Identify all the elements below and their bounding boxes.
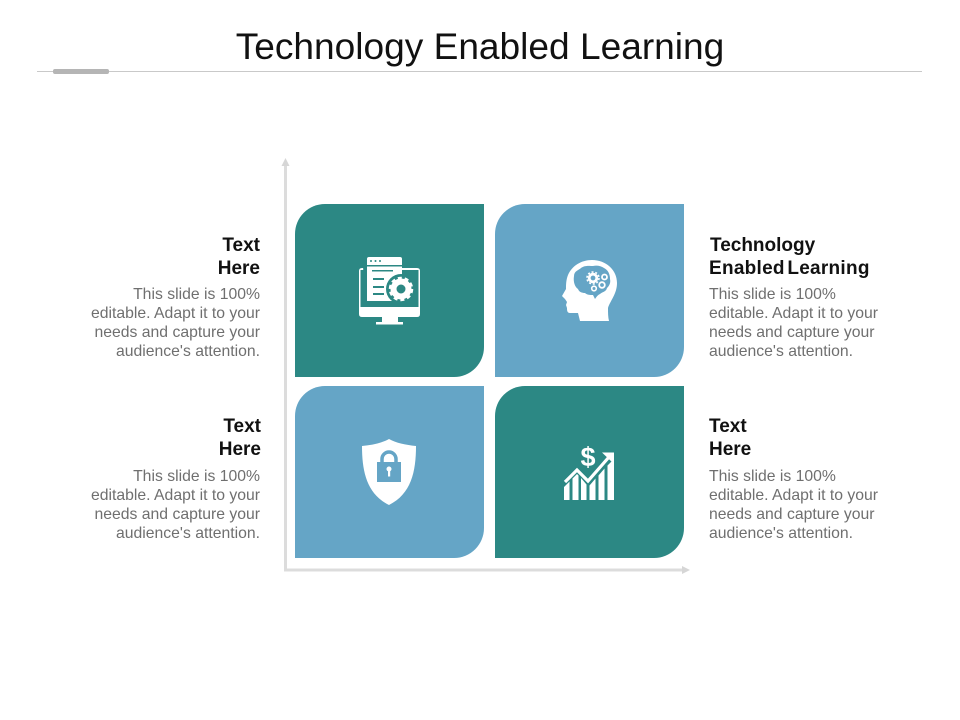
text block: top left: audience's attention.: [116, 343, 260, 360]
text block: bottom right: This slide is 100%: [709, 468, 836, 485]
text block: bottom right: editable. Adapt it to your: [709, 487, 878, 504]
text block: top right: [709, 235, 878, 360]
panel: top left tile: [295, 204, 484, 377]
text block: bottom right: Here: [709, 439, 751, 460]
text block: top right: Enabled Learning: [709, 258, 870, 279]
text block: bottom left: Here: [219, 439, 261, 460]
text block: top left: This slide is 100%: [133, 286, 260, 303]
panel: top right tile: [495, 204, 684, 377]
text block: top right: audience's attention.: [709, 343, 853, 360]
text block: bottom left: needs and capture your: [94, 506, 260, 523]
text block: bottom left: This slide is 100%: [133, 468, 260, 485]
text block: bottom right: Text: [709, 416, 747, 437]
panel: bottom left tile: [295, 386, 484, 558]
icon: monitor with gear: [359, 257, 420, 324]
icon: dollar growth chart: $: [580, 442, 596, 472]
icon: head with gears: [562, 260, 617, 321]
title rule accent: [53, 69, 109, 74]
title rule: [37, 71, 922, 72]
icon: dollar growth chart: [564, 442, 614, 500]
text block: bottom left: editable. Adapt it to your: [91, 487, 260, 504]
text block: top left: Here: [218, 258, 260, 279]
text block: bottom left: audience's attention.: [116, 525, 260, 542]
text block: bottom left: Text: [223, 416, 261, 437]
icon: shield with padlock: [362, 439, 416, 505]
text block: top left: [91, 235, 260, 360]
text block: bottom left: [91, 416, 261, 542]
text block: top left: Text: [222, 235, 260, 256]
text block: top right: needs and capture your: [709, 324, 874, 341]
text block: bottom right: needs and capture your: [709, 506, 874, 523]
text block: top right: editable. Adapt it to your: [709, 305, 878, 322]
text block: top left: needs and capture your: [94, 324, 260, 341]
panel: bottom right tile: [495, 386, 684, 558]
text block: top right: Technology: [710, 235, 815, 256]
text block: top right: This slide is 100%: [709, 286, 836, 303]
text block: bottom right: [709, 416, 878, 542]
text block: top left: editable. Adapt it to your: [91, 305, 260, 322]
title: Technology Enabled Learning: [236, 25, 724, 67]
text block: bottom right: audience's attention.: [709, 525, 853, 542]
